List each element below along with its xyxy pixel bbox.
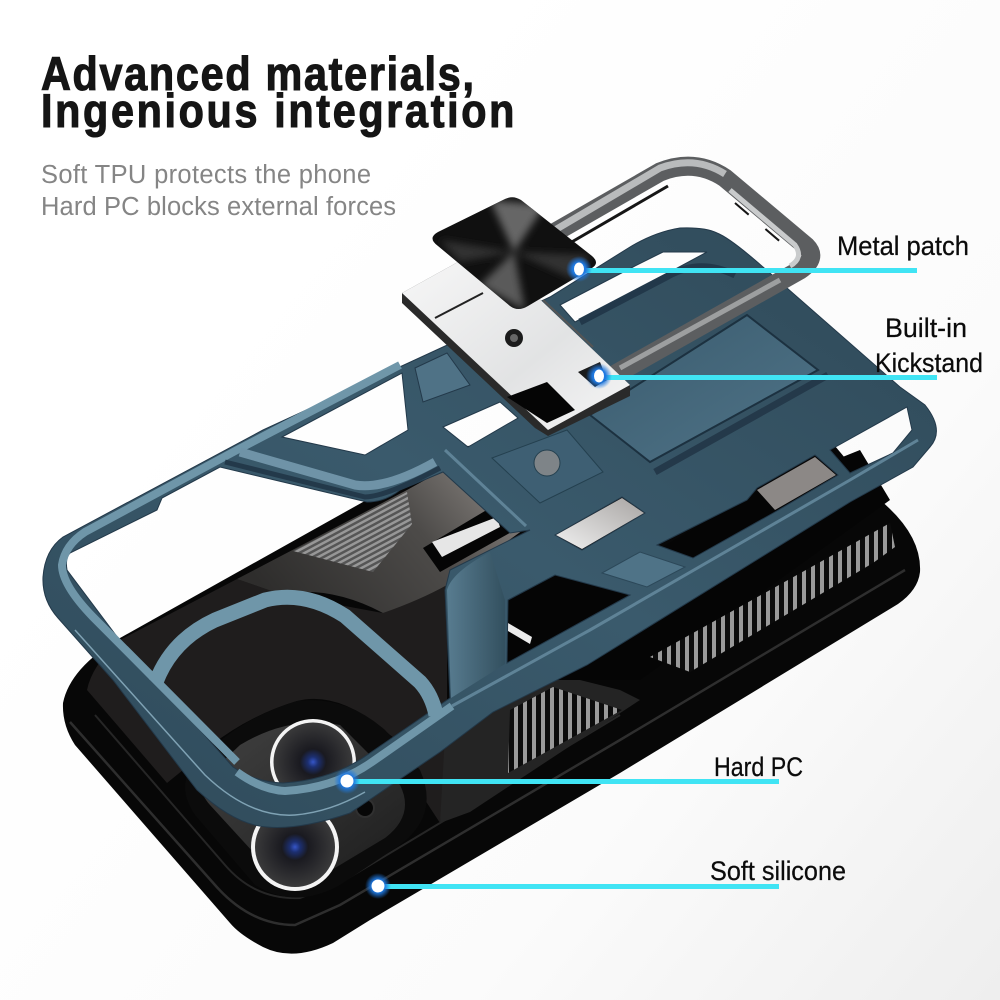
kickstand base plate bbox=[402, 247, 630, 436]
frame thin outer line bbox=[75, 630, 365, 815]
black silicone case bbox=[63, 440, 920, 954]
gap seen through window bbox=[556, 498, 644, 549]
camera module bbox=[185, 700, 427, 898]
heading: Advanced materials, bbox=[41, 49, 474, 101]
lower dark surface bbox=[440, 660, 640, 823]
subheading text: Hard PC blocks external forces bbox=[41, 193, 396, 221]
icon: recess hole bbox=[534, 450, 560, 476]
square recess with hole bbox=[492, 430, 603, 503]
frame bottom light band bbox=[237, 706, 452, 791]
centre arm face bbox=[447, 552, 505, 698]
subheading text: Soft TPU protects the phone bbox=[41, 161, 371, 189]
gloss black behind windows bbox=[500, 450, 890, 680]
built-in kickstand panel bbox=[590, 315, 828, 472]
heading: Ingenious integration bbox=[41, 86, 514, 138]
carbon fibre patch: lower bbox=[508, 687, 622, 773]
carbon fibre patch: upper bbox=[293, 492, 412, 572]
icon: upper lens bbox=[270, 719, 356, 805]
beam dark underside bbox=[225, 462, 440, 497]
case rim highlight bbox=[70, 570, 905, 925]
grey area seen through window bbox=[757, 457, 836, 510]
slit behind frame bbox=[423, 505, 515, 572]
camera opening ring bbox=[156, 597, 436, 715]
metal patch bbox=[432, 197, 596, 309]
heading bbox=[41, 49, 514, 138]
callout: soft silicone bbox=[365, 856, 846, 899]
case inner contour bbox=[95, 715, 620, 898]
button plate on frame bbox=[602, 552, 685, 587]
callout: hard PC: Hard PC bbox=[714, 752, 803, 782]
callout: metal patch: Metal patch bbox=[837, 231, 969, 261]
callout: built-in kickstand: Built-in bbox=[885, 313, 967, 343]
callout: built-in kickstand bbox=[586, 313, 983, 389]
carbon fibre patch: long bbox=[650, 523, 895, 672]
subheading text bbox=[41, 161, 396, 221]
diagonal arm highlight bbox=[445, 450, 526, 526]
icon: lower lens bbox=[251, 803, 339, 891]
beam highlight bbox=[240, 452, 435, 486]
callout: built-in kickstand: Kickstand bbox=[875, 348, 983, 378]
top arc dark inner rail bbox=[580, 267, 735, 322]
callout: soft silicone: Soft silicone bbox=[710, 856, 846, 886]
frame light front band bbox=[62, 365, 400, 762]
panel beside hole bbox=[415, 353, 470, 402]
grey centre surface bbox=[237, 470, 530, 613]
white sliver in lower window bbox=[508, 623, 532, 644]
callout: hard PC bbox=[334, 752, 803, 794]
icon: flash hole bbox=[356, 799, 374, 817]
callout: metal patch bbox=[566, 231, 969, 282]
hard PC frame bbox=[43, 228, 936, 827]
metal kickstand ring bbox=[552, 163, 811, 376]
textured back plate bbox=[87, 579, 447, 823]
icon: plate screw bbox=[505, 329, 523, 347]
frame right light band bbox=[452, 440, 918, 706]
